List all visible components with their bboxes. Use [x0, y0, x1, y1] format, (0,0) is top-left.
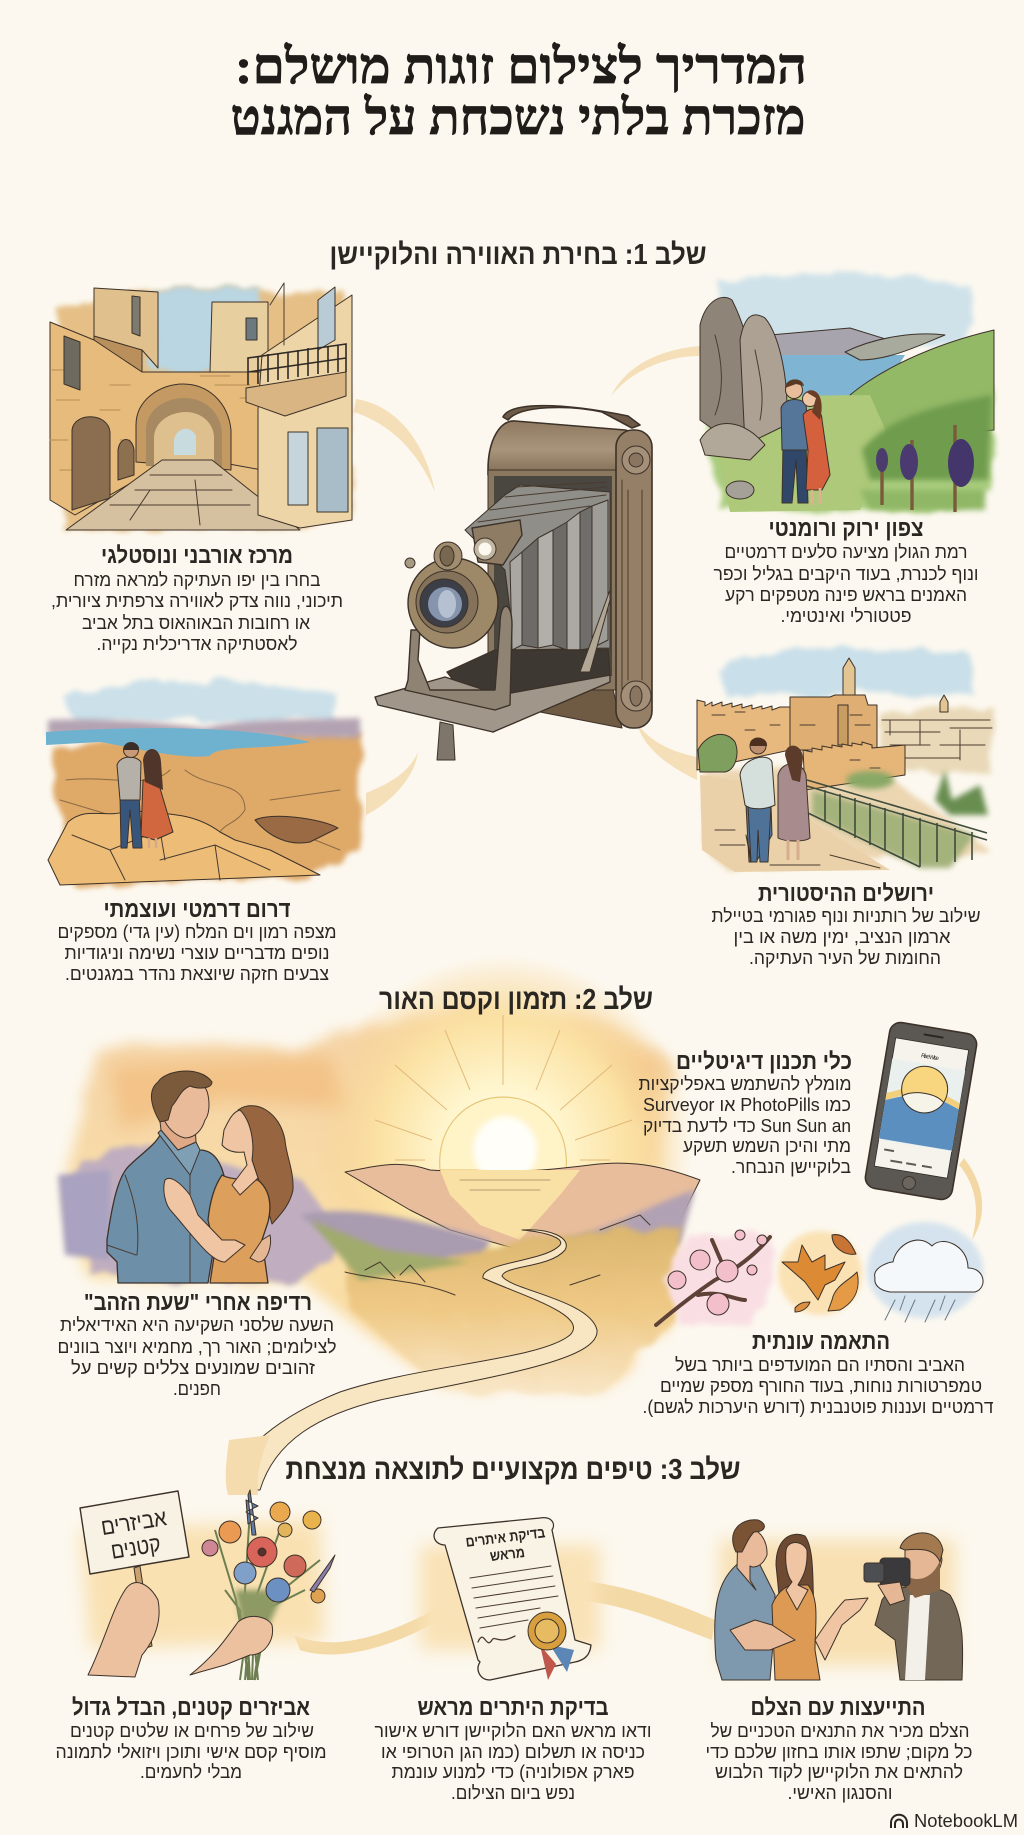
text: dramatic south: צבעים חזקה שיוצאת נהדר במגנטים.: [65, 963, 329, 984]
icon: cherry blossom branch: [656, 1230, 775, 1325]
camera underside: [540, 676, 622, 728]
text: permit check: כניסה או תשלום (כמו הגן הטרופי או: [381, 1741, 645, 1762]
text: seasonal matching: טמפרטורות נוחות, בעוד החורף מספק שמיים: [660, 1375, 982, 1396]
right building: [258, 295, 352, 528]
illustration: golden hour sunset landscape: [58, 955, 700, 1495]
text: urban and nostalgic: או רחובות הבאוהאוס בתל אביב: [82, 612, 310, 633]
woman: [776, 1534, 814, 1605]
text: dramatic south: [58, 896, 336, 984]
violet hills: [70, 1146, 345, 1285]
text: urban and nostalgic: [51, 542, 343, 654]
text: seasonal matching: דרמטיים ועננות פוטנבנית (דורש היערכות לגשם).: [642, 1396, 994, 1417]
heading: step 2: שלב 2: תזמון וקסם האור: [379, 984, 653, 1016]
text: golden hour: חפנים.: [173, 1378, 221, 1399]
text: historic Jerusalem: החומות של העיר העתיקה.: [749, 947, 941, 968]
viewfinder: [472, 520, 522, 565]
text: consulting the photographer: להתאים את הלוקיישן לקוד הלבוש: [715, 1761, 963, 1782]
couple: [117, 742, 173, 848]
text: consulting the photographer: התייעצות עם הצלם: [750, 1694, 926, 1720]
seal: [528, 1612, 574, 1680]
text: seasonal matching: התאמה עונתית: [752, 1328, 890, 1354]
icon: autumn leaves: [778, 1231, 862, 1315]
text: golden hour: רדיפה אחרי "שעת הזהב": [84, 1289, 312, 1315]
text: dramatic south: נופים מדבריים עוצרי נשימה וניגודיות: [64, 942, 330, 963]
vines: [860, 395, 992, 512]
ground: [66, 460, 300, 530]
sign stick: [134, 1566, 152, 1648]
hand holding sign: [88, 1583, 159, 1677]
text: golden hour: השעה שלסני השקיעה היא האידיאלית: [60, 1314, 334, 1335]
illustration: consulting the photographer: [715, 1520, 963, 1680]
illustration: historic Jerusalem: [697, 646, 992, 872]
back building: [210, 302, 268, 372]
text: green and romantic north: [714, 515, 978, 626]
text: digital planning tools: [638, 1048, 852, 1177]
text: dramatic south: מצפה רמון וים המלח (עין גדי) מספקים: [58, 921, 336, 942]
gesturing hands: [815, 1598, 868, 1660]
photographer: [875, 1586, 963, 1680]
woman dress: [208, 1175, 270, 1283]
railing: [807, 780, 987, 867]
couple: [781, 379, 830, 505]
text: permit check: פארק אפולוניה) כדי למנוע עונמת: [392, 1761, 634, 1782]
text: urban and nostalgic: מרכז אורבני ונוסטלגי: [101, 542, 293, 568]
text: digital planning tools: מתי והיכן השמש תשקע: [683, 1135, 851, 1156]
text: small props: מבלי לחעמים.: [140, 1761, 242, 1782]
text: permit check: בדיקת היתרים מראש: [418, 1694, 608, 1720]
text: digital planning tools: כמו PhotoPills או Surveyor: [643, 1094, 851, 1115]
illustration: old Jaffa alley: [50, 283, 352, 530]
camera base plate: [447, 650, 610, 732]
hand holding bouquet: [190, 1616, 273, 1675]
lens assembly: [408, 558, 498, 648]
text: green and romantic north: רמת הגולן מציעה סלעים דרמטיים: [724, 541, 968, 562]
illustration: permit scroll: בדיקת איתרים: [465, 1525, 546, 1551]
bouquet stems: [215, 1510, 320, 1680]
green below railing: [812, 790, 975, 868]
text: urban and nostalgic: תיכוני, נווה צדק לאווירה צרפתית ציורית,: [51, 590, 343, 611]
photographer camera: [864, 1558, 910, 1605]
text: seasonal matching: האביב והסתיו הם המועדפים ביותר בשל: [675, 1354, 965, 1375]
woman face: [222, 1110, 258, 1195]
woman hair: [238, 1106, 293, 1224]
text: consulting the photographer: כל מקום; שתפו אותו בחזון שלכם כדי: [706, 1741, 972, 1762]
sky wash: [65, 1010, 680, 1390]
text: consulting the photographer: [706, 1694, 972, 1803]
text: golden hour: זהובים שמונעים צללים קשים על: [71, 1357, 315, 1378]
arch: [136, 384, 231, 470]
heading: step 3: שלב 3: טיפים מקצועיים לתוצאה מנצחת: [285, 1454, 740, 1486]
foreground rocks: [48, 810, 320, 885]
front standard: [405, 606, 512, 710]
city: [882, 720, 992, 760]
text: green and romantic north: פטטורלי ואינטימי.: [780, 605, 912, 626]
trees: [698, 734, 737, 772]
text: historic Jerusalem: ירושלים ההיסטורית: [758, 880, 934, 906]
text: urban and nostalgic: בחרו בין יפו העתיקה למראה מזרח: [74, 569, 320, 590]
text: small props: שילוב של פרחים או שלטים קטנים: [70, 1720, 314, 1741]
illustration: permit scroll: [420, 1518, 600, 1680]
minaret: [843, 658, 855, 697]
text: historic Jerusalem: שילוב של רותניות ונוף פגורמי בטיילת: [712, 905, 980, 926]
icon: smartphone with sun app: [864, 1021, 978, 1201]
text: green and romantic north: האמנים בראש פינה מטפקים רקע: [725, 584, 967, 605]
right side panel: [616, 430, 652, 728]
fade of road into step 3: [226, 1435, 270, 1495]
sun glow: [313, 955, 693, 1335]
road: [228, 1230, 597, 1490]
illustration: Golan and Kinneret: [700, 273, 994, 512]
icon: smartphone with sun app: Rise Wise: [921, 1053, 940, 1062]
text: green and romantic north: ונוף לכנרת, בעוד היקבים בגליל וכפר: [714, 563, 978, 584]
sign: אביזרים: [99, 1504, 169, 1540]
text: digital planning tools: כלי תכנון דיגיטליים: [676, 1048, 852, 1074]
illustration: permit scroll: מראש: [489, 1545, 526, 1565]
handle: [503, 406, 640, 428]
sun: [440, 1097, 566, 1170]
text: permit check: ודאו מראש האם הלוקיישן דורש אישור: [374, 1720, 652, 1741]
camera back and top: [488, 421, 636, 478]
walls: [697, 700, 790, 770]
text: digital planning tools: Sun Sun an כדי לדעת בדיוק: [643, 1115, 851, 1136]
flowers: [202, 1490, 335, 1603]
illustration: small props: [80, 1490, 335, 1680]
text: permit check: נפש ביום הצילום.: [451, 1782, 575, 1803]
balcony: [246, 372, 346, 416]
text: small props: מוסיף קסם אישי ותוכן ויזואלי לתמונה: [56, 1741, 326, 1762]
text: small props: אביזרים קטנים, הבדל גדול: [72, 1694, 310, 1720]
walkway: [700, 775, 890, 872]
icon: rain cloud: [867, 1222, 983, 1322]
text: historic Jerusalem: ארמון הנציב, ימין משה או בין: [734, 926, 951, 947]
bellows: [465, 482, 610, 650]
illustration: vintage folding camera: [375, 406, 652, 760]
arrow: ribbons between tips: [294, 1580, 715, 1655]
text: golden hour: [58, 1289, 336, 1399]
text: seasonal matching: [642, 1328, 994, 1417]
text: small props: [56, 1694, 326, 1782]
text: consulting the photographer: הצלם מכיר את התנאים הטכניים של: [710, 1720, 970, 1741]
title: מזכרת בלתי נשכחת על המגנט: [230, 89, 806, 145]
arrow: curved connectors to camera: [354, 346, 700, 815]
illustration: couple at sunset: [107, 1071, 293, 1283]
arrow: phone to seasons: [959, 1158, 982, 1240]
man hair: [151, 1071, 212, 1122]
text: digital planning tools: מומלץ להשתמש באפליקציות: [638, 1073, 852, 1094]
man neck and head: [158, 1105, 196, 1150]
text: digital planning tools: בלוקיישן הנבחר.: [731, 1156, 851, 1177]
heading: step 1: שלב 1: בחירת האווירה והלוקיישן: [330, 239, 706, 271]
text: permit check: [374, 1694, 652, 1803]
left tower: [94, 288, 158, 368]
valley: [350, 1225, 680, 1392]
couple: [740, 738, 810, 862]
text: consulting the photographer: והסנגון האישי.: [788, 1782, 892, 1803]
text: urban and nostalgic: לאסטתיקה אדריכלית נקייה.: [96, 633, 298, 654]
embracing arm: [164, 1178, 245, 1262]
sign: קטנים: [109, 1530, 162, 1564]
text: green and romantic north: צפון ירוק ורומנטי: [768, 515, 924, 541]
title: המדריך לצילום זוגות מושלם:: [235, 38, 807, 94]
man: [715, 1562, 775, 1680]
text: dramatic south: דרום דרמטי ועוצמתי: [104, 896, 290, 922]
collar: [158, 1130, 200, 1175]
illustration: Dead Sea desert: [46, 680, 360, 885]
NotebookLM wordmark: NotebookLM: [914, 1811, 1018, 1831]
man shirt: [107, 1135, 225, 1283]
icon: NotebookLM logo: [891, 1815, 907, 1828]
text: historic Jerusalem: [712, 880, 980, 968]
left wall: [50, 322, 262, 515]
sign: [80, 1491, 189, 1574]
title: [230, 38, 807, 145]
text: golden hour: לצילומים; האור רך, מחמיא ויוצר בוונים: [58, 1336, 336, 1357]
